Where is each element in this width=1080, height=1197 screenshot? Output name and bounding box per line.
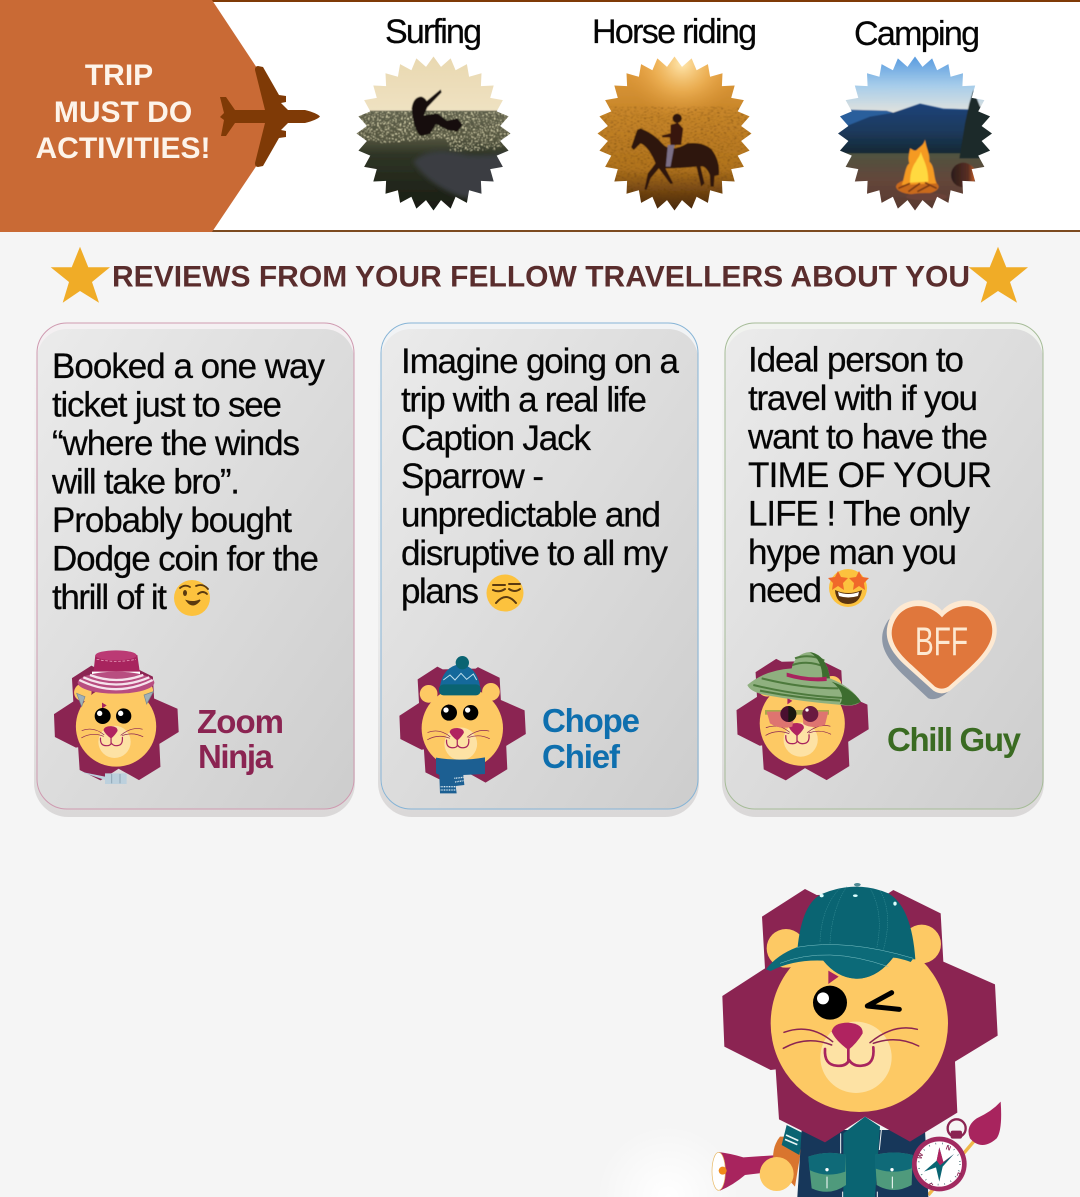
panel: review card Chill Guy: [722, 323, 1044, 817]
review text: LIFE ! The only: [748, 494, 970, 534]
lion head: [722, 889, 998, 1142]
review text: [401, 342, 680, 611]
name: Zoom Ninja: [197, 703, 284, 775]
review text: Sparrow -: [401, 457, 544, 496]
review text: need: [748, 571, 822, 610]
review text: unpredictable and: [401, 496, 661, 534]
name: Chope Chief: [542, 702, 640, 775]
review text: “where the winds: [52, 424, 300, 463]
icon: airplane: [220, 66, 320, 167]
icon: compass: [912, 1119, 967, 1191]
review text: Caption Jack: [401, 419, 592, 458]
review text: will take bro”.: [51, 462, 240, 502]
review text: [747, 340, 992, 610]
icon: tail: [928, 1102, 1001, 1195]
panel: trip activities banner: [0, 0, 1080, 232]
review text: Imagine going on a: [401, 342, 680, 381]
label: Surfing: Surfing: [385, 13, 482, 51]
name: Zoom Ninja: Zoom: [197, 703, 284, 740]
name: Chill Guy: Chill Guy: [887, 721, 1022, 758]
name: Zoom Ninja: Ninja: [198, 738, 274, 775]
mascot: winking lion with cap: [712, 883, 1001, 1197]
icon: unamused emoji: [486, 574, 524, 612]
review text: Dodge coin for the: [52, 540, 319, 578]
glow behind flashlight: [596, 1125, 740, 1197]
banner title: TRIP: [85, 59, 153, 92]
icon: left star: [51, 247, 110, 303]
avatar: Zoom Ninja lion: [54, 650, 179, 784]
pockets: [808, 1153, 846, 1192]
review text: travel with if you: [748, 379, 978, 418]
badge: BFF heart: BFF: [915, 620, 968, 664]
icon: winking emoji: [174, 580, 210, 616]
banner title: MUST DO: [54, 96, 192, 129]
label: Horse riding: Horse riding: [592, 13, 757, 51]
compass letters: [917, 1144, 963, 1189]
icon: right star: [969, 247, 1028, 303]
heading text: REVIEWS FROM YOUR FELLOW TRAVELLERS ABOUT YOU: [112, 261, 970, 294]
review text: Probably bought: [52, 501, 292, 540]
eye and wink: [813, 986, 899, 1020]
banner title: ACTIVITIES!: [35, 132, 211, 165]
name: Chope Chief: Chope: [542, 702, 640, 739]
compass letters: S: [927, 1181, 934, 1189]
avatar: Chope Chief lion: [399, 656, 526, 793]
panel: review card Zoom Ninja: [34, 323, 355, 817]
review text: plans: [401, 572, 479, 611]
review text: thrill of it: [52, 578, 167, 617]
compass letters: N: [945, 1144, 952, 1153]
label: Camping: Camping: [854, 15, 980, 53]
banner title: [35, 59, 211, 165]
icon: teal cap: [766, 883, 915, 979]
heading: reviews: [51, 247, 1028, 303]
review text: TIME OF YOUR: [748, 456, 992, 495]
review text: hype man you: [748, 533, 957, 572]
review text: trip with a real life: [401, 380, 647, 420]
backpack and sleeve: [773, 1125, 803, 1187]
name: Chope Chief: Chief: [542, 738, 621, 775]
review text: Booked a one way: [52, 347, 326, 386]
photo: camping: [838, 56, 992, 210]
icon: star-struck emoji: [828, 569, 869, 607]
avatar: Chill Guy lion: [737, 652, 869, 780]
review text: ticket just to see: [52, 386, 282, 424]
photo: horse riding: [598, 56, 752, 210]
review text: disruptive to all my: [401, 534, 668, 573]
badge: BFF heart: [882, 600, 997, 699]
vest: [797, 1117, 928, 1197]
photo: surfing: [356, 56, 510, 210]
icon: flashlight in paw: [712, 1152, 794, 1191]
compass letters: E: [955, 1171, 963, 1178]
review text: want to have the: [747, 418, 988, 456]
review text: Ideal person to: [748, 340, 964, 380]
review text: [51, 347, 326, 617]
panel: review card Chope Chief: [378, 323, 699, 817]
compass letters: W: [917, 1151, 926, 1160]
